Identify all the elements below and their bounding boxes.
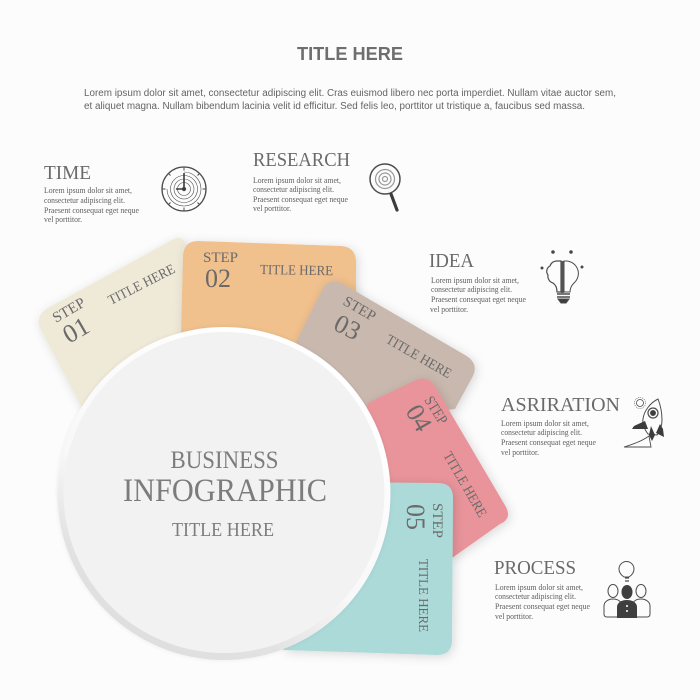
intro paragraph xyxy=(84,88,616,112)
icon: team with bulb xyxy=(604,562,650,618)
block: process xyxy=(494,557,590,621)
card: step 01: TITLE HERE xyxy=(106,262,178,309)
icon: rocket xyxy=(624,398,664,447)
card: step 01: STEP xyxy=(50,295,88,326)
block: idea: vel porttitor. xyxy=(430,305,468,314)
block: aspiration: consectetur adipiscing elit. xyxy=(501,428,582,437)
block: process: Lorem ipsum dolor sit amet, xyxy=(495,583,583,592)
intro paragraph: et aliquet magna. Nullam bibendum lacinia velit id efficitur. Sed felis leo, porttitor ut tristique a, faucibus sed massa. xyxy=(84,101,585,112)
card: step 05: 05 xyxy=(401,504,430,530)
central circle xyxy=(58,327,390,660)
card: step 03: TITLE HERE xyxy=(383,332,454,382)
card: step 03 xyxy=(296,282,475,420)
icon: brain bulb xyxy=(541,251,583,303)
block: aspiration: vel porttitor. xyxy=(501,448,539,457)
icon: radar clock xyxy=(162,167,206,211)
block: research: Praesent consequat eget neque xyxy=(253,195,348,204)
block: aspiration: Praesent consequat eget neque xyxy=(501,438,596,447)
card: step 04: TITLE HERE xyxy=(440,450,489,520)
block: research: RESEARCH xyxy=(253,149,350,171)
card: step 04: STEP xyxy=(421,394,450,428)
block: aspiration xyxy=(501,394,620,457)
block: research: consectetur adipiscing elit. xyxy=(253,185,334,194)
block: idea: IDEA xyxy=(429,250,475,272)
card: step 03: STEP xyxy=(340,294,378,325)
block: time: TIME xyxy=(44,162,91,184)
card: step 03: 03 xyxy=(329,309,366,346)
card: step 04 xyxy=(350,379,508,558)
block: research xyxy=(253,149,350,213)
block: idea xyxy=(429,250,526,314)
icon: magnifier xyxy=(370,164,400,210)
intro paragraph: Lorem ipsum dolor sit amet, consectetur adipiscing elit. Cras euismod libero nec porta imperdiet. Nullam vitae auctor sem, xyxy=(84,88,616,99)
block: time: Lorem ipsum dolor sit amet, xyxy=(44,186,132,195)
block: aspiration: Lorem ipsum dolor sit amet, xyxy=(501,419,589,428)
card: step 05: TITLE HERE xyxy=(415,559,430,632)
block: process: PROCESS xyxy=(494,557,576,579)
block: time: vel porttitor. xyxy=(44,215,82,224)
card: step 02 xyxy=(181,241,356,345)
card: step 05: STEP xyxy=(429,503,445,538)
block: process: vel porttitor. xyxy=(495,612,533,621)
block: idea: consectetur adipiscing elit. xyxy=(431,285,512,294)
title: TITLE HERE xyxy=(297,43,403,64)
block: research: Lorem ipsum dolor sit amet, xyxy=(253,176,341,185)
card: step 01 xyxy=(39,238,190,408)
block: research: vel porttitor. xyxy=(253,204,291,213)
block: idea: Lorem ipsum dolor sit amet, xyxy=(431,276,519,285)
card: step 02: STEP xyxy=(203,250,238,266)
card: step 02: 02 xyxy=(205,264,231,293)
card: step 04: 04 xyxy=(400,400,438,437)
circle heading: infographic: INFOGRAPHIC xyxy=(123,473,327,509)
block: idea: Praesent consequat eget neque xyxy=(431,295,526,304)
block: time xyxy=(44,162,139,224)
block: time: consectetur adipiscing elit. xyxy=(44,196,125,205)
block: time: Praesent consequat eget neque xyxy=(44,206,139,215)
block: process: consectetur adipiscing elit. xyxy=(495,592,576,601)
card: step 02: TITLE HERE xyxy=(260,263,333,279)
block: aspiration: ASRIRATION xyxy=(501,394,620,416)
block: process: Praesent consequat eget neque xyxy=(495,602,590,611)
circle heading: business: BUSINESS xyxy=(170,447,278,474)
circle subtitle: TITLE HERE xyxy=(172,519,274,541)
card: step 01: 01 xyxy=(58,311,95,349)
card: step 05 xyxy=(283,482,453,655)
